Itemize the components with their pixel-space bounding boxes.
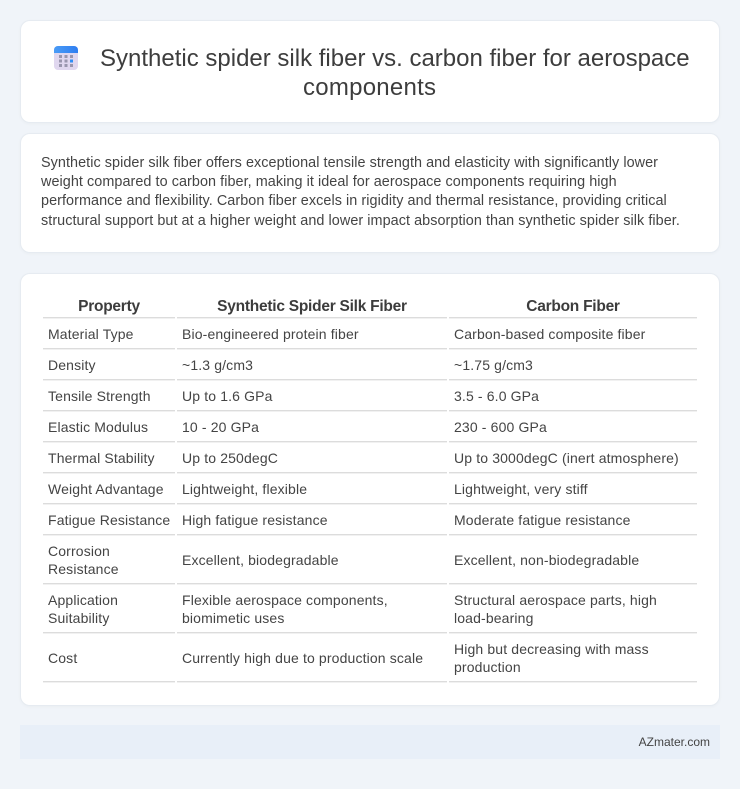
row: fatigue resistance: Fatigue Resistance [48,512,170,528]
row: fatigue resistance: Moderate fatigue resistance [454,512,631,528]
row: cost: Currently high due to production scale [182,650,423,666]
row: cost [48,641,649,675]
panel: title card [20,20,720,123]
row: fatigue resistance [48,512,631,528]
row: elastic modulus [48,419,547,435]
row: cost: Cost [48,650,77,666]
title: components [303,74,436,101]
summary paragraph [41,155,680,229]
title: Synthetic spider silk fiber vs. carbon fiber for aerospace [100,45,690,72]
row: material type [48,326,646,342]
panel: summary text card [20,133,720,253]
row: elastic modulus: 10 - 20 GPa [182,419,259,435]
summary paragraph: performance and flexibility. Carbon fiber excels in rigidity and thermal resistance, providing critical [41,193,667,209]
summary paragraph: Synthetic spider silk fiber offers exceptional tensile strength and elasticity with significantly lower [41,155,658,171]
row: density [48,357,533,373]
row: application suitability [48,592,657,626]
row: density: Density [48,357,96,373]
row: material type: Material Type [48,326,134,342]
row: corrosion resistance: Excellent, non-biodegradable [454,552,639,568]
row: thermal stability: Thermal Stability [48,450,155,466]
row: application suitability: Suitability [48,610,109,626]
row: application suitability: Flexible aerospace components, [182,592,388,608]
row: material type: Carbon-based composite fiber [454,326,645,342]
summary paragraph: weight compared to carbon fiber, making it ideal for aerospace components requiring high [41,174,617,190]
title [100,45,690,101]
summary paragraph: structural support but at a higher weight and lower impact absorption than synthetic spider silk fiber. [41,213,680,229]
panel: comparison table card [20,273,720,706]
row: corrosion resistance: Excellent, biodegradable [182,552,339,568]
row: cost: High but decreasing with mass [454,641,649,657]
row: application suitability: biomimetic uses [182,610,284,626]
row: density: ~1.75 g/cm3 [454,357,533,373]
header: carbon fiber: Carbon Fiber [526,298,620,315]
row: material type: Bio-engineered protein fiber [182,326,359,342]
row: weight advantage: Lightweight, very stiff [454,481,588,497]
row: application suitability: load-bearing [454,610,534,626]
footer bar [20,725,720,759]
row: tensile strength: Tensile Strength [48,388,151,404]
row: corrosion resistance [48,543,639,577]
row: fatigue resistance: High fatigue resistance [182,512,328,528]
row: elastic modulus: 230 - 600 GPa [454,419,547,435]
row: thermal stability: Up to 3000degC (inert atmosphere) [454,450,679,466]
row: tensile strength: 3.5 - 6.0 GPa [454,388,539,404]
row: tensile strength [48,388,539,404]
row: thermal stability [48,450,679,466]
row: elastic modulus: Elastic Modulus [48,419,148,435]
row: density: ~1.3 g/cm3 [182,357,253,373]
header: synthetic spider silk fiber: Synthetic Spider Silk Fiber [217,298,407,315]
row: weight advantage: Weight Advantage [48,481,164,497]
icon: calendar grid [54,46,78,70]
row: thermal stability: Up to 250degC [182,450,278,466]
row: application suitability: Application [48,592,118,608]
header: property: Property [78,298,140,315]
comparison table [43,298,697,683]
row: corrosion resistance: Resistance [48,561,119,577]
footer source text: AZmater.com [639,735,710,749]
row: application suitability: Structural aerospace parts, high [454,592,657,608]
row: corrosion resistance: Corrosion [48,543,110,559]
row: weight advantage: Lightweight, flexible [182,481,307,497]
row: cost: production [454,659,521,675]
row: tensile strength: Up to 1.6 GPa [182,388,273,404]
row: weight advantage [48,481,588,497]
